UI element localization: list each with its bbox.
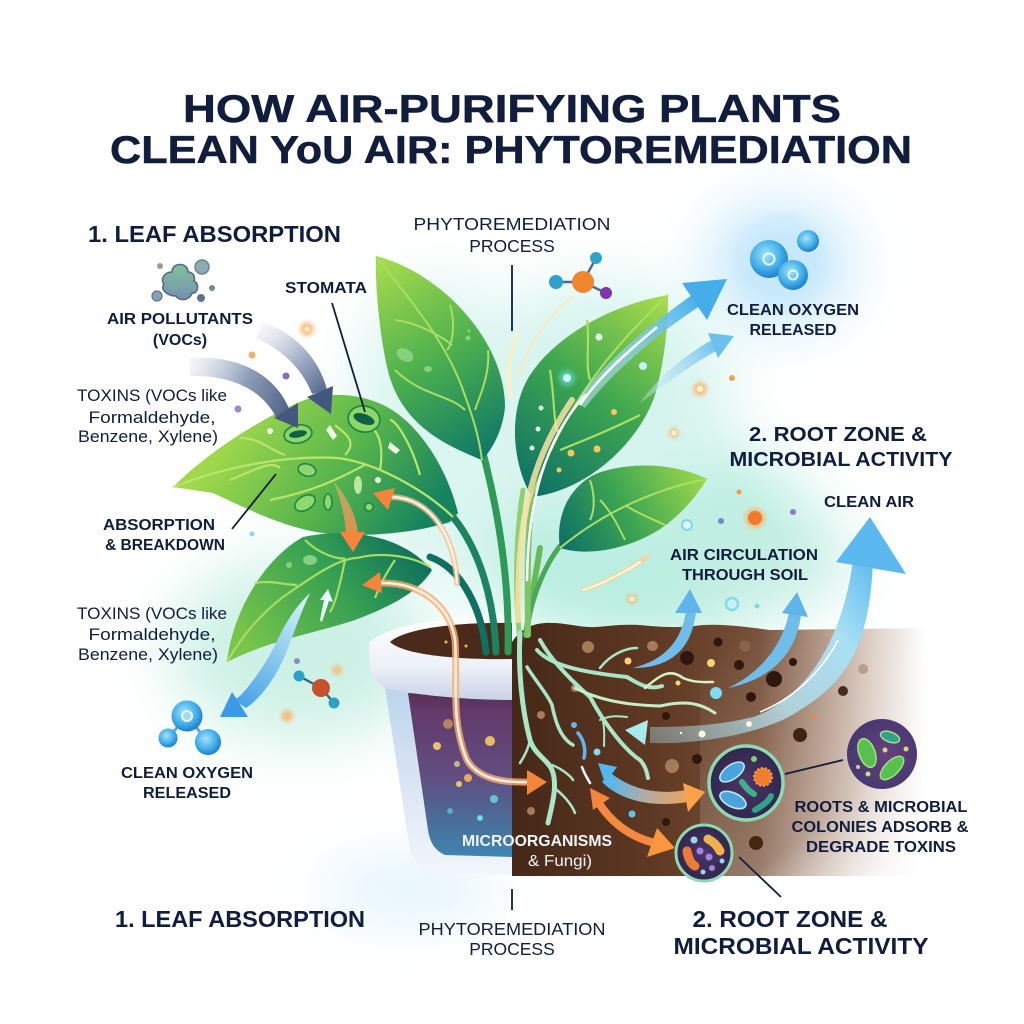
icon: oxygen molecule lower left	[158, 700, 221, 755]
label: phytoremediation process top	[414, 214, 610, 256]
pot particles	[433, 640, 498, 821]
soil cross-section	[512, 623, 925, 876]
leaf: top centre	[376, 256, 505, 460]
label: air circulation: THROUGH SOIL	[682, 567, 808, 584]
floating particles	[234, 322, 796, 722]
soft mint glow behind plant	[170, 205, 850, 912]
label: toxins upper: Formaldehyde,	[88, 409, 216, 427]
heading: root zone top: 2. ROOT ZONE &	[749, 424, 927, 446]
label: clean oxygen top right: RELEASED	[750, 322, 836, 339]
microbe colony: large	[709, 746, 783, 820]
heading: leaf absorption bottom: 1. LEAF ABSORPTION	[115, 906, 365, 932]
label: clean oxygen lower left	[121, 765, 253, 802]
label: clean oxygen lower left: RELEASED	[143, 785, 231, 802]
microbe colony: right	[847, 719, 917, 789]
arrow: clean oxygen to upper right	[577, 279, 727, 408]
arrow: polluted air into stoma left	[190, 358, 298, 428]
label: air pollutants	[107, 311, 253, 349]
label: phytoremediation process bottom	[418, 919, 606, 959]
arrow: orange double between root and small colony	[590, 788, 675, 857]
title: HOW AIR-PURIFYING PLANTS	[183, 88, 841, 131]
label: phytoremediation process bottom: PHYTOREMEDIATION	[418, 919, 606, 939]
molecule: top centre	[549, 252, 612, 299]
arrow: orange downward in leaf	[333, 480, 365, 552]
label: clean oxygen top right: CLEAN OXYGEN	[727, 302, 859, 319]
stomata	[283, 403, 382, 445]
title	[110, 88, 912, 172]
label: toxins upper: Benzene, Xylene)	[78, 428, 218, 446]
icon: VOC pollution cloud	[152, 260, 215, 302]
label: phytoremediation process bottom: PROCESS	[469, 939, 555, 959]
heading: root zone top	[730, 424, 953, 471]
arrow: triangle head toward root	[625, 720, 648, 745]
label: air pollutants: (VOCs)	[153, 332, 207, 349]
label: toxins lower	[77, 605, 227, 664]
label: absorption and breakdown: ABSORPTION	[103, 517, 215, 534]
label: toxins lower: TOXINS (VOCs like	[77, 605, 227, 623]
arrow: clean air rising from soil	[650, 517, 906, 743]
roots	[519, 633, 715, 823]
arrow: clean oxygen secondary	[640, 333, 734, 403]
label: toxins upper	[77, 387, 227, 446]
label: roots and microbial colonies: ROOTS & MICROBIAL	[794, 799, 968, 816]
microbes near roots	[571, 722, 590, 783]
heading: root zone bottom: MICROBIAL ACTIVITY	[674, 933, 928, 959]
label: clean oxygen lower left: CLEAN OXYGEN	[121, 765, 253, 782]
arrow: blue to orange between root and colony	[598, 763, 705, 812]
label: air pollutants: AIR POLLUTANTS	[107, 311, 253, 328]
label: toxins upper: TOXINS (VOCs like	[77, 387, 227, 405]
label: microorganisms	[462, 833, 612, 870]
leaf: upper right	[515, 295, 668, 497]
icon: oxygen bubbles top right	[734, 214, 830, 310]
label: roots and microbial colonies	[792, 799, 969, 856]
leader lines	[232, 265, 843, 910]
arrow: air circulation left	[633, 589, 702, 668]
title: CLEAN YoU AIR: PHYTOREMEDIATION	[110, 129, 912, 172]
heading: leaf absorption top: 1. LEAF ABSORPTION	[88, 221, 341, 247]
plant pot	[369, 615, 512, 875]
label: absorption and breakdown	[103, 517, 225, 554]
label: clean oxygen top right	[727, 302, 859, 339]
leaf: lower left	[227, 533, 432, 662]
label: toxins lower: Formaldehyde,	[88, 626, 216, 644]
plant stems	[430, 417, 560, 652]
heading: root zone top: MICROBIAL ACTIVITY	[730, 449, 953, 471]
leaf: lower right	[559, 465, 707, 552]
label: phytoremediation process top: PHYTOREMEDIATION	[414, 214, 610, 234]
molecule: lower left	[294, 658, 340, 708]
leaf: large left	[173, 395, 458, 535]
arrow: clean oxygen to lower left	[220, 589, 333, 717]
label: air circulation: AIR CIRCULATION	[670, 547, 818, 564]
label: roots and microbial colonies: COLONIES ADSORB &	[792, 819, 969, 836]
label: phytoremediation process top: PROCESS	[469, 236, 555, 256]
label: microorganisms: MICROORGANISMS	[462, 833, 612, 850]
soil particles	[527, 638, 868, 850]
label: air circulation	[670, 547, 818, 584]
arrow: long orange from leaf through pot to roots	[362, 572, 547, 795]
arrow: air circulation right	[728, 592, 808, 688]
label: stomata: STOMATA	[285, 280, 367, 297]
arrow: orange to upper leaf	[373, 488, 457, 583]
label: toxins lower: Benzene, Xylene)	[78, 646, 218, 664]
label: roots and microbial colonies: DEGRADE TOXINS	[806, 839, 956, 856]
microbe colony: small	[676, 825, 732, 881]
glowing uptake streams	[508, 297, 647, 620]
heading: root zone bottom: 2. ROOT ZONE &	[692, 906, 888, 932]
label: microorganisms: & Fungi)	[528, 853, 592, 870]
label: clean air: CLEAN AIR	[824, 494, 914, 511]
label: absorption and breakdown: & BREAKDOWN	[105, 537, 225, 554]
arrow: polluted air into stoma right	[256, 322, 333, 414]
heading: root zone bottom	[674, 906, 928, 959]
